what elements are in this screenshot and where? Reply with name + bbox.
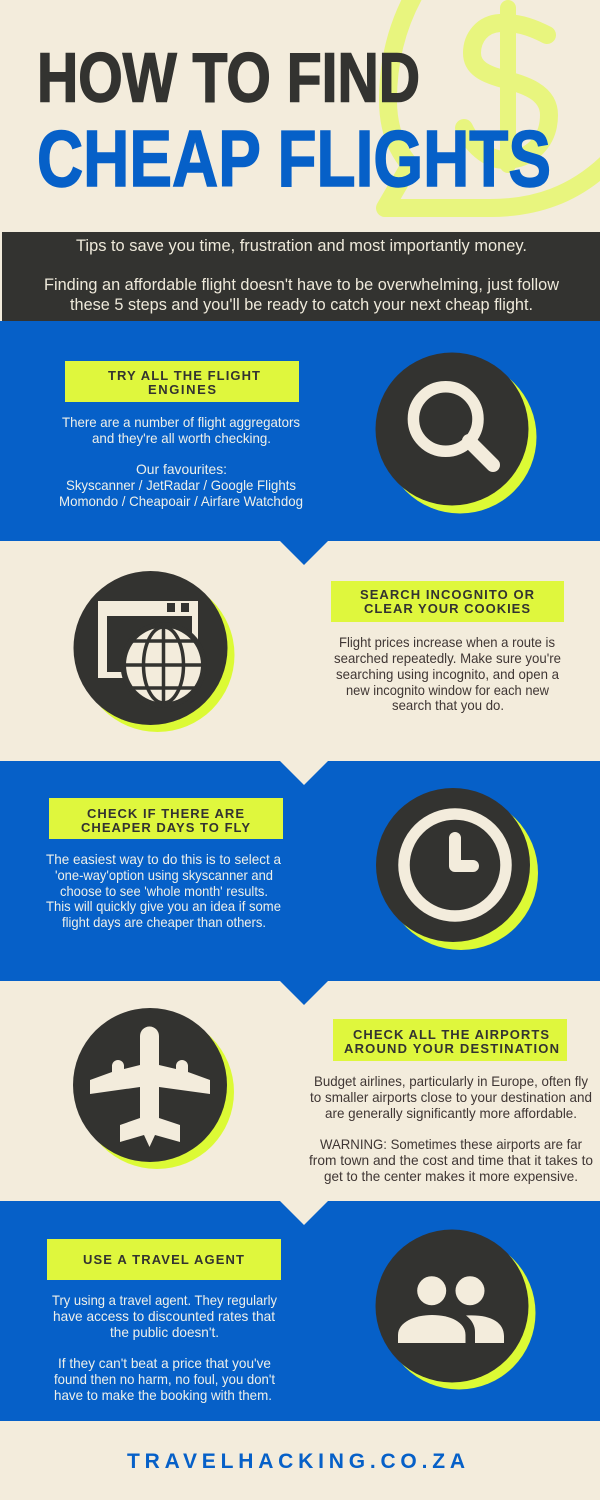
panel: step 4 airports (73, 1008, 593, 1184)
icon: two people (376, 1230, 536, 1390)
step 5 heading: USE A TRAVEL AGENT (83, 1252, 244, 1267)
title (37, 38, 551, 203)
step 1 heading: TRY ALL THE FLIGHT (108, 368, 260, 383)
step 4 heading: AROUND YOUR DESTINATION (344, 1041, 559, 1056)
step 3 heading: CHECK IF THERE ARE (87, 806, 244, 821)
step 2 text: searched repeatedly. Make sure you're (334, 650, 561, 666)
step 5 text: have to make the booking with them. (54, 1387, 272, 1403)
intro text: Finding an affordable flight doesn't have to be overwhelming, just follow (44, 276, 559, 294)
step 3 heading (49, 798, 283, 839)
step 4 heading (333, 1019, 567, 1061)
step 4 heading: CHECK ALL THE AIRPORTS (353, 1027, 549, 1042)
step 3 text: choose to see 'whole month' results. (60, 883, 268, 899)
step 3 text: 'one-way'option using skyscanner and (55, 867, 273, 883)
step 4 text: Budget airlines, particularly in Europe, often fly (314, 1073, 588, 1089)
step 3 text (46, 851, 281, 930)
footer website: TRAVELHACKING.CO.ZA (127, 1450, 465, 1473)
step 3 text: flight days are cheaper than others. (62, 914, 266, 930)
step 4 text (309, 1073, 593, 1184)
step 1 text: There are a number of flight aggregators (62, 414, 300, 430)
step 2 text (334, 634, 561, 713)
step 1 text: Skyscanner / JetRadar / Google Flights (66, 477, 296, 493)
step 3 text: The easiest way to do this is to select a (46, 851, 281, 867)
step 2 heading: SEARCH INCOGNITO OR (360, 587, 535, 602)
step 3 text: This will quickly give you an idea if some (46, 898, 281, 914)
step 4 text: get to the center makes it more expensive. (324, 1168, 578, 1184)
title: HOW TO FIND (37, 38, 420, 116)
icon: magnifying glass (376, 352, 536, 514)
step 4 text: to smaller airports close to your destination and (310, 1089, 592, 1105)
step 2 heading (331, 581, 564, 622)
step 2 text: new incognito window for each new (346, 682, 550, 698)
step 5 text: found then no harm, no foul, you don't (54, 1371, 275, 1387)
intro panel (2, 232, 600, 321)
panel: step 5 travel agent (0, 1201, 600, 1421)
step 1 text: Momondo / Cheapoair / Airfare Watchdog (59, 493, 303, 509)
step 1 text (59, 414, 303, 509)
intro text (44, 237, 559, 314)
step 4 text: WARNING: Sometimes these airports are far (320, 1136, 582, 1152)
panel: step 1 flight engines (0, 321, 600, 565)
icon: dollar speech bubble background (385, 0, 600, 208)
step 5 text: have access to discounted rates that (53, 1308, 275, 1324)
step 1 heading: ENGINES (148, 382, 216, 397)
step 2 text: Flight prices increase when a route is (339, 634, 555, 650)
step 1 text: and they're all worth checking. (92, 430, 271, 446)
step 5 heading (47, 1239, 281, 1280)
icon: clock (376, 788, 538, 950)
step 5 text (52, 1292, 277, 1403)
icon: browser window with globe (74, 571, 234, 732)
step 2 text: search that you do. (392, 697, 504, 713)
icon: airplane (73, 1008, 234, 1169)
step 4 text: are generally significantly more affordable. (325, 1105, 577, 1121)
step 5 text: the public doesn't. (110, 1324, 219, 1340)
step 1 heading (65, 361, 299, 402)
step 2 heading: CLEAR YOUR COOKIES (364, 601, 530, 616)
intro text: these 5 steps and you'll be ready to catch your next cheap flight. (70, 296, 533, 314)
step 1 text: Our favourites: (136, 461, 227, 477)
panel: step 2 incognito (74, 571, 564, 732)
step 5 text: If they can't beat a price that you've (58, 1355, 271, 1371)
panel: step 3 cheaper days (0, 761, 600, 1005)
step 2 text: searching using incognito, and open a (336, 666, 559, 682)
intro text: Tips to save you time, frustration and most importantly money. (76, 237, 527, 255)
step 3 heading: CHEAPER DAYS TO FLY (81, 820, 250, 835)
step 5 text: Try using a travel agent. They regularly (52, 1292, 277, 1308)
step 4 text: from town and the cost and time that it takes to (309, 1152, 593, 1168)
